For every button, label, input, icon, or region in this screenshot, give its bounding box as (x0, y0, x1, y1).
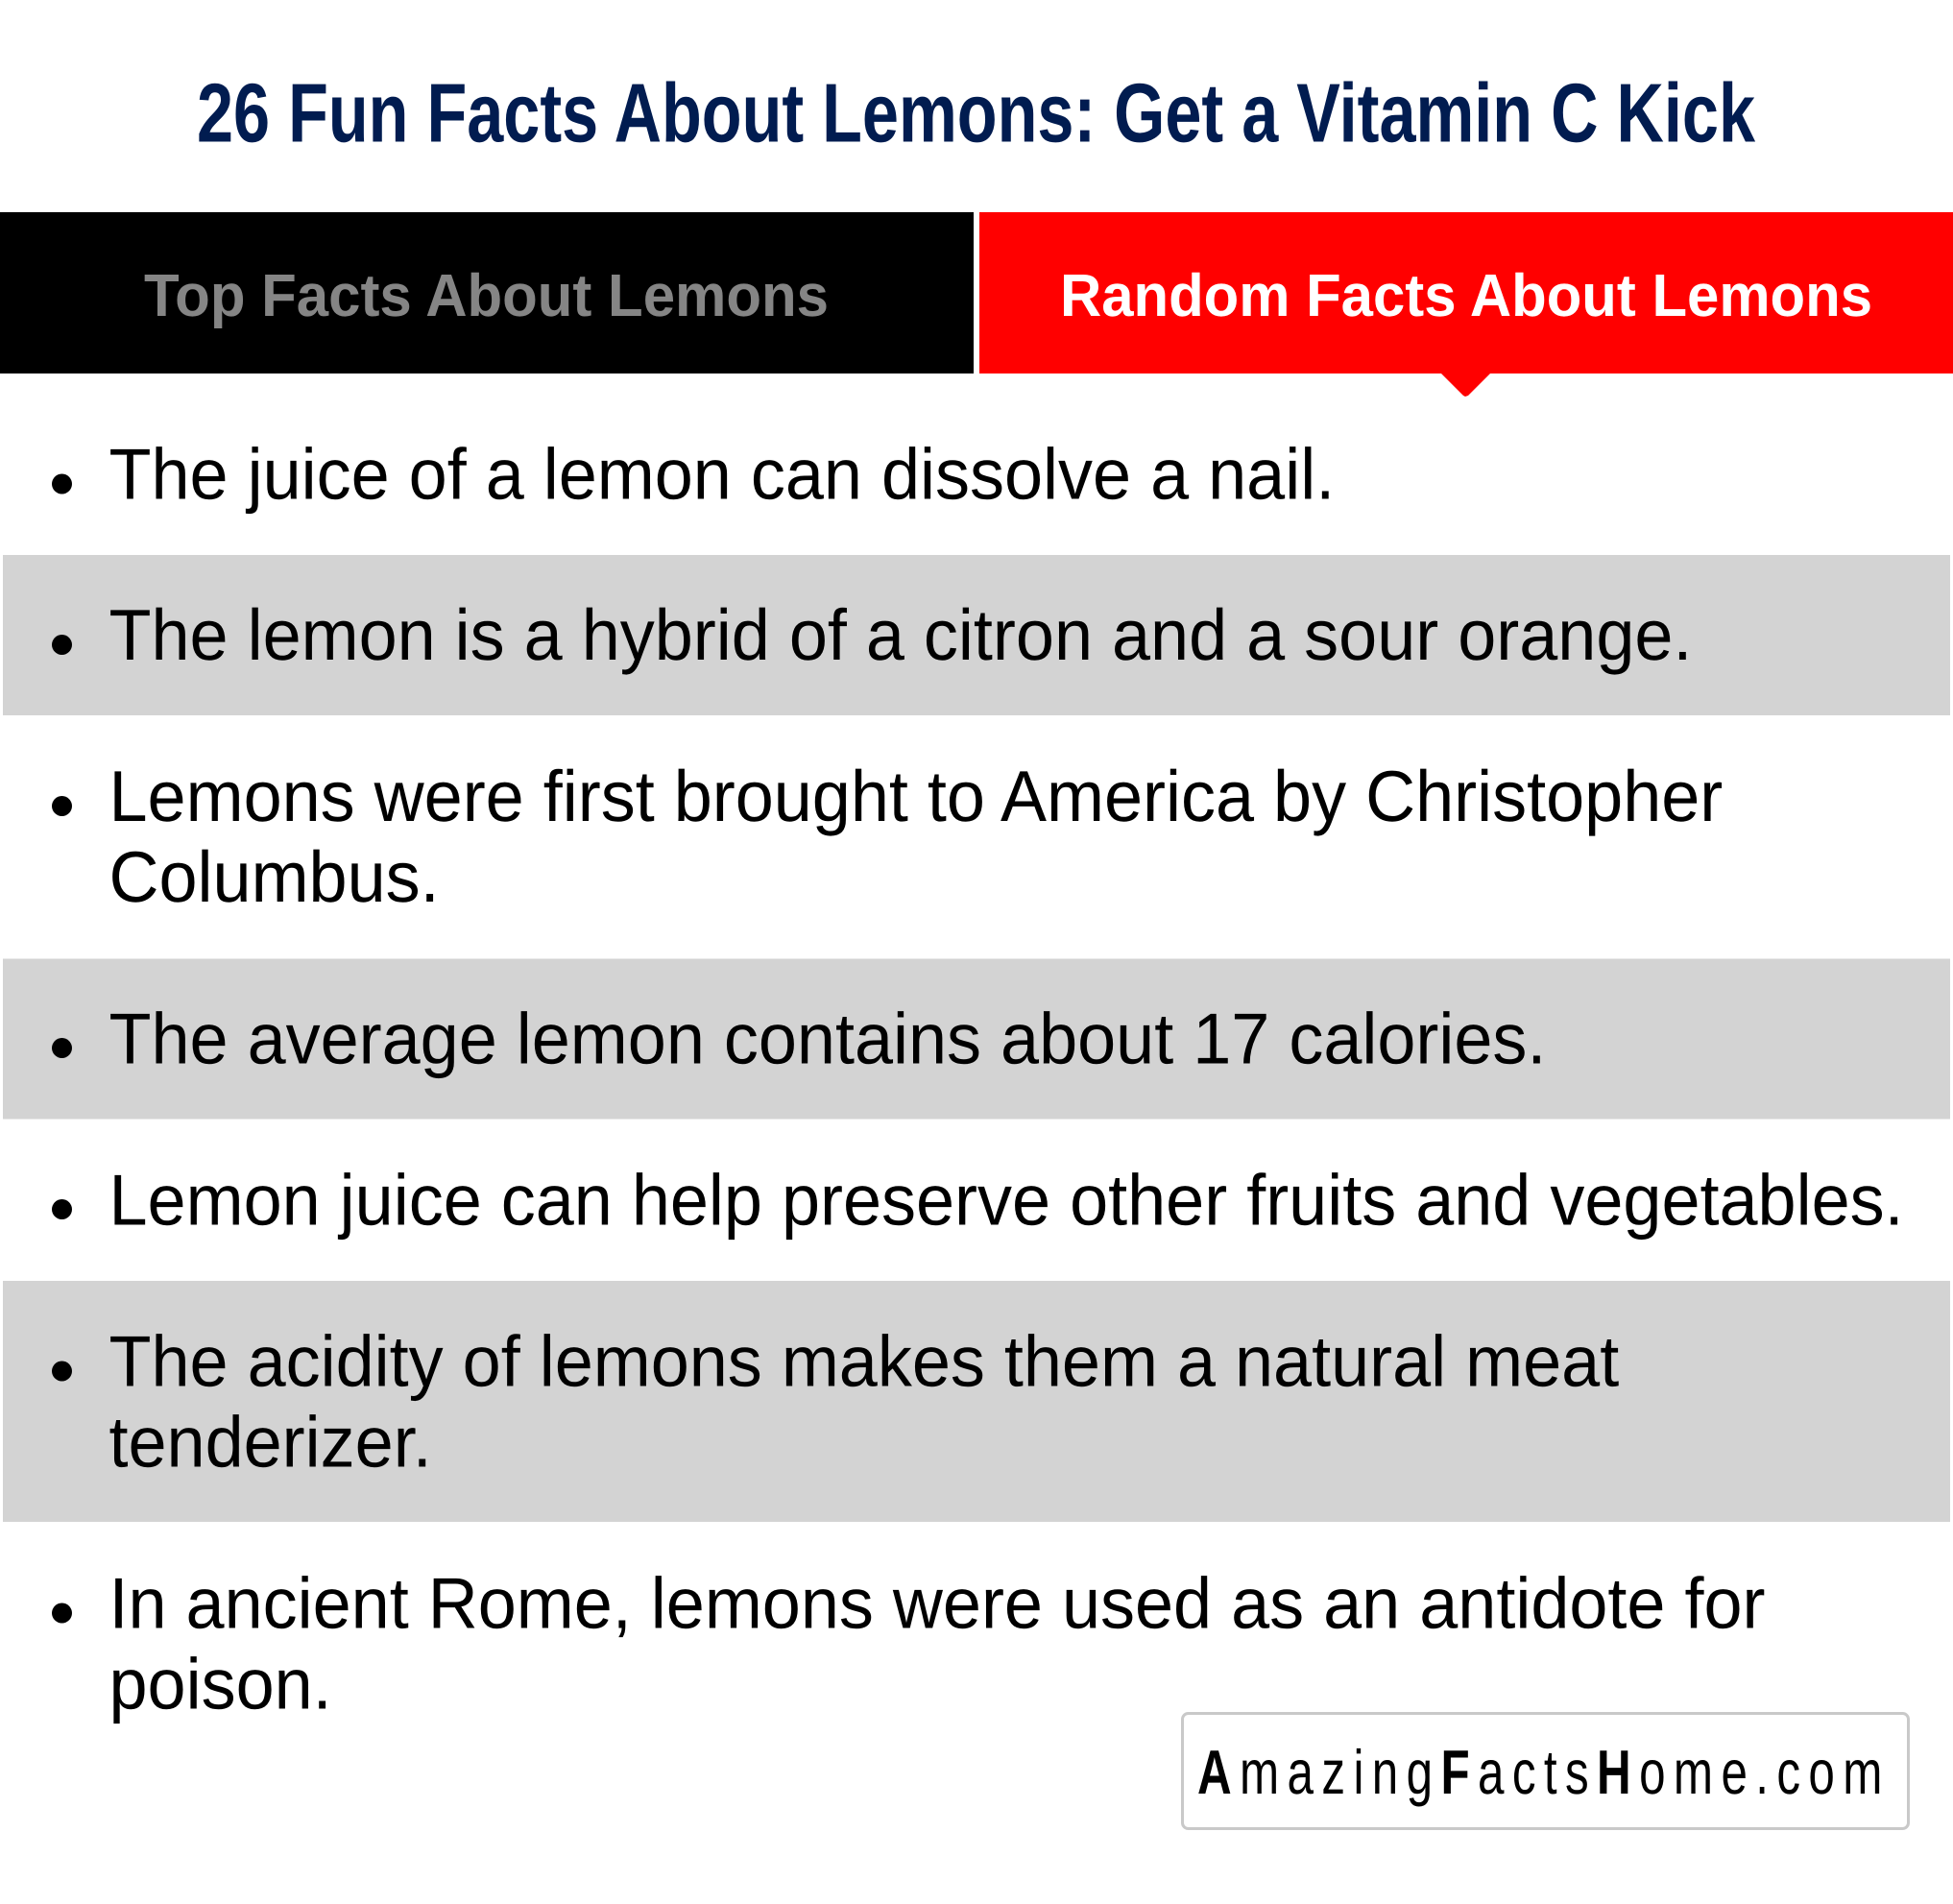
fact 6 (3, 1281, 1950, 1522)
fact 4 (3, 958, 1950, 1120)
tab: top facts (inactive): Top Facts About Lemons (144, 262, 829, 329)
fact 6: The acidity of lemons makes them a natural meat (109, 1321, 1619, 1402)
tab: random facts (active) (979, 212, 1953, 397)
fact 7: In ancient Rome, lemons were used as an antidote for (109, 1563, 1765, 1644)
fact 3: Lemons were first brought to America by Christopher (109, 756, 1723, 836)
watermark badge: AmazingFactsHome.com (1197, 1737, 1891, 1807)
fact 3 (52, 756, 1723, 917)
tab: top facts (inactive) (0, 212, 974, 374)
fact 3: Columbus. (109, 836, 440, 917)
fact 4: The average lemon contains about 17 calories. (109, 999, 1546, 1079)
fact 7 (52, 1563, 1765, 1724)
watermark badge (1183, 1713, 1909, 1828)
fact 2 (3, 555, 1950, 715)
fact 1: The juice of a lemon can dissolve a nail. (109, 434, 1335, 515)
fact 6: tenderizer. (109, 1402, 432, 1482)
tab: random facts (active): Random Facts About Lemons (1060, 262, 1872, 329)
fact 7: poison. (109, 1644, 332, 1724)
fact 5: Lemon juice can help preserve other fruits and vegetables. (109, 1160, 1904, 1241)
fact 2: The lemon is a hybrid of a citron and a sour orange. (109, 594, 1692, 675)
